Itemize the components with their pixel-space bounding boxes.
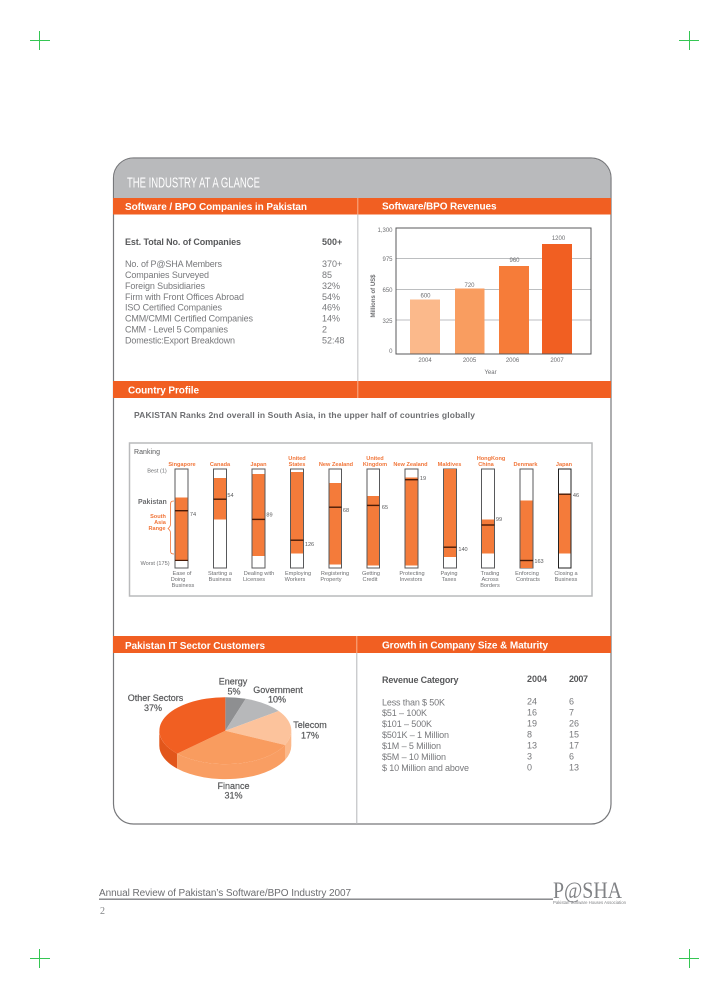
footer title: Annual Review of Pakistan’s Software/BPO Industry 2007: [99, 888, 351, 899]
indicator labels: Business: [209, 577, 232, 583]
scale labels: Asia: [154, 520, 167, 526]
revenue bar chart: [371, 228, 591, 376]
slice: other sectors: [159, 697, 225, 754]
main panel: [114, 158, 611, 824]
indicator labels: Borders: [480, 583, 500, 589]
pie labels: [128, 676, 327, 800]
slice: telecom: [225, 711, 291, 745]
growth table: [382, 674, 588, 773]
crop mark bottom left: [30, 949, 50, 968]
companies table: 14%: [322, 314, 340, 324]
scale labels: Pakistan: [138, 499, 167, 506]
growth table: 6: [569, 752, 574, 762]
companies table: CMM - Level 5 Companies: [125, 324, 228, 334]
companies table: 54%: [322, 292, 340, 302]
bar: trading across borders: [482, 469, 502, 568]
companies table: Foreign Subsidiaries: [125, 281, 206, 291]
country labels: New Zealand: [319, 462, 354, 468]
bar: registering property: 68: [343, 508, 349, 514]
title: THE INDUSTRY AT A GLANCE: [127, 174, 260, 192]
companies table: 85: [322, 270, 332, 280]
indicator labels: Workers: [285, 577, 306, 583]
growth table: $5M – 10 Million: [382, 752, 446, 762]
country labels: Singapore: [168, 462, 196, 468]
band: companies heading: [113, 198, 611, 214]
pie chart: [128, 676, 327, 800]
pie labels: 5%: [227, 686, 241, 696]
companies table: CMM/CMMI Certified Companies: [125, 314, 254, 324]
country labels: Denmark: [514, 462, 538, 468]
growth table: 13: [527, 740, 537, 750]
bar: enforcing contracts: [520, 469, 544, 568]
companies table: 46%: [322, 302, 340, 312]
crop mark top right: [679, 31, 699, 50]
bars: [410, 244, 572, 354]
growth table: $51 – 100K: [382, 708, 427, 718]
slice: energy: [225, 697, 246, 731]
growth table: $101 – 500K: [382, 719, 432, 729]
x axis labels: 2004: [418, 358, 432, 364]
growth table: 8: [527, 730, 532, 740]
logo: Pakistan Software Houses Association: [553, 900, 626, 905]
country labels: Canada: [210, 462, 231, 468]
bar: protecting investors: [405, 469, 426, 568]
slice: government: [225, 699, 279, 731]
crop mark top left: [30, 31, 50, 50]
ranking heading: Ranking: [134, 449, 160, 456]
pie labels: 31%: [224, 790, 243, 800]
grid lines and frame: [396, 258, 591, 320]
scale labels: Worst (175): [140, 561, 170, 567]
bar values: [420, 236, 566, 300]
lower column divider: [356, 653, 357, 824]
growth table: 26: [569, 718, 579, 728]
bar: trading across borders: 99: [496, 517, 502, 523]
y axis labels: 325: [382, 319, 393, 325]
bar: paying taxes: [444, 469, 468, 568]
country labels: China: [478, 462, 495, 468]
growth table: 6: [569, 696, 574, 706]
scale labels: [138, 468, 170, 567]
indicator labels: Enforcing: [515, 571, 539, 577]
companies table: 2: [322, 324, 327, 334]
y axis title: Millions of US$: [371, 274, 377, 318]
growth table: 7: [569, 708, 574, 718]
country labels: Japan: [250, 462, 267, 468]
indicator labels: Registering: [321, 571, 349, 577]
growth table: Revenue Category: [382, 675, 458, 685]
growth table: 19: [527, 718, 537, 728]
bar: registering property: [329, 469, 349, 568]
x axis labels: 2006: [506, 358, 520, 364]
companies table: Firm with Front Offices Abroad: [125, 292, 244, 302]
indicator labels: Employing: [285, 571, 311, 577]
companies table: Companies Surveyed: [125, 270, 209, 280]
slice: finance: [177, 731, 285, 764]
side: finance: [177, 745, 285, 779]
bar values: 720: [464, 283, 475, 289]
bar values: 600: [420, 294, 431, 300]
band: it sector customers: Pakistan IT Sector Customers: [125, 641, 265, 652]
upper column divider: [357, 214, 358, 381]
scale labels: Best (1): [147, 468, 167, 474]
companies table: Domestic:Export Breakdown: [125, 336, 235, 346]
bar: paying taxes: 140: [458, 547, 468, 553]
indicator labels: Taxes: [442, 577, 457, 583]
ranking bars: [175, 469, 579, 568]
indicator labels: Across: [481, 577, 499, 583]
header background: [114, 158, 610, 198]
footer rule: [99, 898, 553, 900]
indicator labels: Business: [555, 577, 578, 583]
y axis labels: [377, 228, 393, 355]
band: growth heading: Growth in Company Size & Maturity: [382, 640, 548, 652]
indicator labels: Credit: [363, 577, 378, 583]
band: companies heading: Software / BPO Companies in Pakistan: [125, 202, 307, 213]
y axis labels: 650: [382, 288, 393, 294]
bar: starting a business: 54: [227, 493, 234, 499]
indicator labels: Property: [320, 577, 342, 583]
y axis labels: 1,300: [377, 228, 393, 234]
pie labels: Other Sectors: [128, 693, 184, 703]
bar: dealing with licenses: [252, 469, 273, 568]
bar: enforcing contracts: 163: [534, 559, 544, 565]
bar: ease of doing business: 74: [190, 512, 196, 518]
scale labels: South: [150, 514, 166, 520]
bar values: 960: [509, 258, 520, 264]
growth table: 2004: [527, 674, 547, 684]
x axis labels: [418, 358, 564, 364]
bar values: 1200: [552, 236, 566, 242]
band: country profile: Country Profile: [128, 386, 199, 396]
band: country profile: [113, 381, 611, 398]
indicator labels: Doing: [171, 577, 185, 583]
country labels: HongKong: [477, 456, 506, 462]
pie labels: 10%: [268, 694, 286, 704]
country labels: States: [289, 462, 305, 468]
bar: employing workers: 126: [305, 542, 314, 548]
growth table: 13: [569, 762, 579, 772]
growth table: 15: [569, 730, 579, 740]
country labels: [168, 456, 573, 468]
bar: getting credit: [367, 469, 388, 568]
growth table: 16: [527, 708, 537, 718]
country labels: Japan: [556, 462, 573, 468]
pie labels: Energy: [219, 676, 248, 686]
logo: P@SHA: [553, 878, 622, 903]
companies table: 500+: [322, 237, 342, 247]
growth table: 2007: [569, 674, 588, 684]
y axis labels: 975: [382, 257, 393, 263]
side: other sectors: [159, 731, 177, 769]
growth table: 17: [569, 740, 579, 750]
companies table: Est. Total No. of Companies: [125, 237, 241, 247]
companies table: 32%: [322, 281, 340, 291]
indicator labels: Investors: [400, 577, 423, 583]
indicator labels: Getting: [362, 571, 380, 577]
indicator labels: Starting a: [208, 571, 233, 577]
axis titles: Year: [484, 370, 497, 376]
pie labels: Government: [253, 685, 303, 695]
pie labels: 37%: [144, 703, 162, 713]
pie labels: 17%: [301, 730, 319, 740]
growth table: $501K – 1 Million: [382, 730, 449, 740]
companies table: 52:48: [322, 336, 345, 346]
band: revenues heading: Software/BPO Revenues: [382, 202, 497, 212]
pie labels: Finance: [217, 781, 250, 791]
indicator labels: Ease of: [173, 571, 192, 577]
companies table: ISO Certified Companies: [125, 302, 222, 312]
scale labels: Range: [148, 526, 166, 532]
indicator labels: Closing a: [554, 571, 579, 577]
x axis labels: 2005: [463, 358, 477, 364]
indicator labels: Trading: [481, 571, 499, 577]
indicator labels: Licenses: [243, 577, 265, 583]
growth table: $ 10 Million and above: [382, 763, 469, 773]
country labels: Kingdom: [363, 462, 387, 468]
bar: closing a business: 46: [573, 493, 579, 499]
growth table: 0: [527, 762, 532, 772]
bar: starting a business: [214, 469, 234, 568]
growth table: $1M – 5 Million: [382, 741, 441, 751]
bar: employing workers: [290, 469, 314, 568]
companies table: No. of P@SHA Members: [125, 259, 222, 269]
country labels: United: [288, 456, 306, 462]
bar: getting credit: 65: [382, 505, 388, 511]
bar: protecting investors: 19: [420, 476, 426, 482]
country labels: Maldives: [438, 462, 461, 468]
country labels: United: [366, 456, 384, 462]
page number: 2: [100, 906, 105, 917]
growth table: 24: [527, 696, 537, 706]
country profile headline: PAKISTAN Ranks 2nd overall in South Asia, in the upper half of countries globally: [134, 410, 475, 420]
indicator labels: Paying: [440, 571, 458, 577]
indicator labels: Protecting: [399, 571, 425, 577]
crop mark bottom right: [679, 949, 699, 968]
band: it sector customers: [113, 636, 611, 653]
companies table: 370+: [322, 259, 342, 269]
growth table: 3: [527, 752, 532, 762]
y axis labels: 0: [389, 349, 393, 355]
growth table: Less than $ 50K: [382, 698, 445, 708]
indicator labels: Dealing with: [244, 571, 274, 577]
side: telecom: [285, 731, 291, 760]
south asia range brace: [168, 501, 174, 554]
indicator labels: Contracts: [516, 577, 540, 583]
x axis labels: 2007: [550, 358, 564, 364]
bar: closing a business: [558, 469, 579, 568]
pie labels: Telecom: [293, 720, 327, 730]
ranking panel: [130, 443, 592, 596]
bar: dealing with licenses: 89: [266, 512, 273, 518]
indicator labels: [171, 571, 579, 589]
country labels: New Zealand: [393, 462, 428, 468]
companies table: [125, 237, 345, 346]
bar: ease of doing business: [175, 469, 196, 568]
indicator labels: Business: [172, 583, 195, 589]
